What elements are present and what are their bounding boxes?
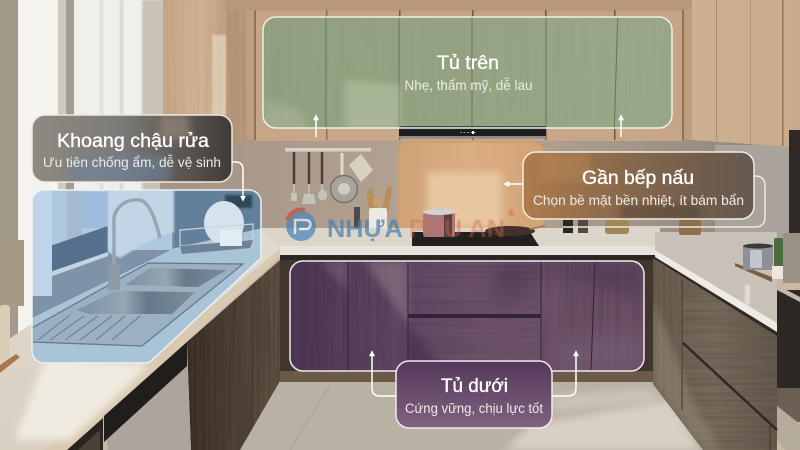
right wood tall panel [692,0,800,148]
back counter [255,228,660,261]
drainboard ridges [38,315,140,340]
text: upper cabinet note: Nhẹ, thẩm mỹ, dễ lau [404,78,532,93]
arrow: base cabinet right [552,354,576,396]
arrow: base cabinet left [372,354,396,396]
right base cabinets [653,258,778,450]
faucet [112,198,162,264]
panel: base cabinets highlight (purple) [290,261,644,371]
heading: Tủ trên: Tủ trên [437,53,499,74]
dishwasher [67,342,191,450]
callout: Gần bếp nấu [523,152,765,227]
panel: sink zone highlight [32,190,262,363]
callout: Khoang chậu rửa [32,115,232,182]
right counter [655,232,777,337]
cooktop wall panel [399,142,543,232]
window reflection [52,190,172,250]
heading: Gần bếp nấu: Gần bếp nấu [582,168,694,189]
heading: Tủ dưới: Tủ dưới [441,376,508,397]
oven column right [772,130,800,450]
cooktop with pots [412,207,545,246]
window and curtains [0,0,170,345]
left countertop [0,230,280,450]
text: watermark name: NHỰA PHÚ AN [327,213,505,243]
pot on tray [735,238,783,282]
jar and wooden board [0,305,20,373]
panel: upper cabinets highlight (Tủ trên) [263,10,672,135]
backsplash wall [160,138,800,243]
spice jars [563,220,701,235]
sink frame [32,263,243,346]
text: registered mark: ® [508,208,515,218]
wall behind sink [32,228,260,318]
left base cabinet [187,258,281,450]
dishes and rack [225,195,252,208]
heading: Khoang chậu rửa: Khoang chậu rửa [57,131,209,152]
upper cabinets [225,0,695,141]
floor [240,382,703,450]
dark wall at right [170,190,262,248]
arrow: upper left [315,118,317,137]
center base cabinet body [280,260,653,382]
text: base cabinet note: Cứng vững, chịu lực tốt [405,401,543,416]
arrow: to cooktop panel [507,183,523,185]
rail and utensils [285,148,392,232]
range hood [399,128,546,138]
text: cooking zone note: Chọn bề mặt bền nhiệt, ít bám bẩn [533,193,744,208]
arrow: sink callout to sink zone [232,162,243,198]
arrow: upper right [620,118,622,137]
basins [125,268,227,287]
callout: Tủ dưới [396,361,552,428]
watermark: Nhựa Phú An logo [286,208,515,243]
text: sink note: Ưu tiên chống ẩm, dễ vệ sinh [43,155,221,170]
icon: logo mark [286,209,316,241]
tall wood panel [163,0,248,142]
